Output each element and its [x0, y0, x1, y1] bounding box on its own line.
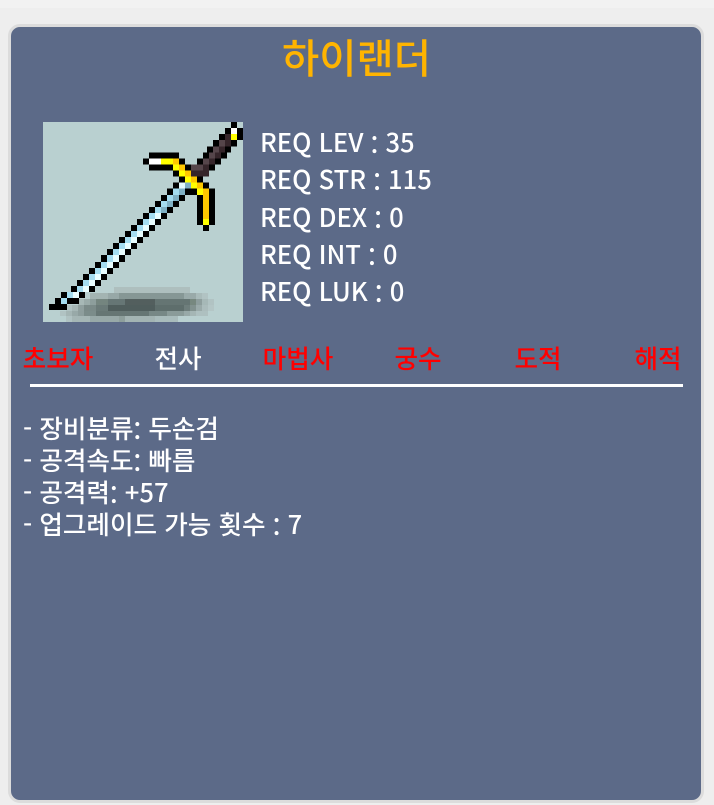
requirement stats — [260, 123, 432, 312]
detail: equipment type: - 장비분류: 두손검 — [23, 409, 219, 449]
detail: upgrade slots: - 업그레이드 가능 횟수 : 7 — [23, 505, 302, 545]
item details list — [23, 409, 302, 545]
job: pirate: 해적 — [634, 339, 682, 376]
job: beginner: 초보자 — [23, 339, 93, 376]
job class row — [23, 339, 682, 376]
title: 하이랜더 — [282, 26, 431, 85]
stat: level: REQ LEV : 35 — [260, 123, 415, 163]
detail: attack speed: - 공격속도: 빠름 — [23, 441, 195, 481]
stat: luck: REQ LUK : 0 — [260, 272, 404, 312]
icon: pixel-art two-handed sword — [43, 122, 243, 322]
stat: dexterity: REQ DEX : 0 — [260, 198, 404, 238]
job: magician: 마법사 — [263, 339, 333, 376]
detail: attack power: - 공격력: +57 — [23, 473, 169, 513]
job: warrior: 전사 — [154, 339, 202, 376]
stat: strength: REQ STR : 115 — [260, 160, 432, 200]
stat: intelligence: REQ INT : 0 — [260, 235, 398, 275]
divider line — [30, 384, 683, 387]
job: archer: 궁수 — [394, 339, 442, 376]
job: thief: 도적 — [514, 339, 562, 376]
